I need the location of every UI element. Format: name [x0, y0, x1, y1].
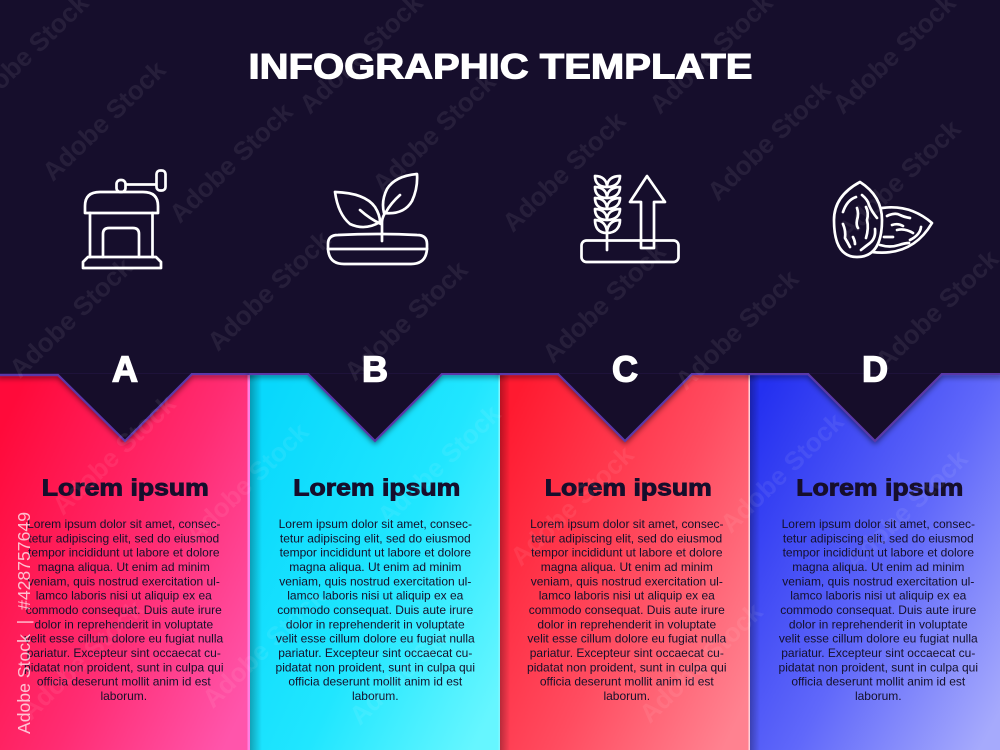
letter C: C — [612, 348, 638, 390]
body text B: magna aliqua. Ut enim ad minim — [289, 560, 461, 574]
stock watermarks: Adobe Stock — [831, 113, 967, 246]
stock watermarks: Adobe Stock — [179, 416, 315, 549]
body text D — [779, 517, 978, 703]
letter B: B — [362, 348, 388, 390]
body text C — [527, 517, 727, 703]
body text D: laborum. — [855, 689, 902, 703]
body text C: veniam, quis nostrud exercitation ul- — [531, 574, 723, 588]
panel: C — [500, 375, 750, 750]
title: INFOGRAPHIC TEMPLATE — [248, 48, 752, 86]
top band cover — [0, 0, 1000, 373]
stock watermarks: Adobe Stock — [46, 388, 182, 521]
body text A: dolor in reprehenderit in voluptate — [34, 617, 214, 631]
stock watermarks: Adobe Stock — [838, 443, 974, 576]
heading D: Lorem ipsum — [796, 474, 963, 500]
notch: D — [750, 372, 1000, 441]
body text B: velit esse cillum dolore eu fugiat nulla — [276, 632, 475, 646]
body text A: laborum. — [100, 689, 147, 703]
body text D: tetur adipiscing elit, sed do eiusmod — [783, 531, 974, 545]
body text D: veniam, quis nostrud exercitation ul- — [782, 574, 974, 588]
notch: B — [250, 372, 500, 441]
stock watermarks: Adobe Stock — [343, 598, 479, 731]
body text C: officia deserunt mollit anim id est — [540, 675, 714, 689]
stock watermarks: Adobe Stock — [496, 105, 632, 238]
stock watermarks: Adobe Stock — [701, 74, 837, 207]
panel: A — [0, 375, 250, 750]
panel: B — [250, 375, 500, 750]
stock watermarks: Adobe Stock — [633, 596, 769, 729]
body text D: tempor incididunt ut labore et dolore — [783, 546, 974, 560]
body text D: velit esse cillum dolore eu fugiat nulla — [779, 632, 978, 646]
stock watermarks: Adobe Stock — [163, 96, 299, 229]
notch: A — [0, 372, 250, 441]
stock watermarks: Adobe Stock — [3, 251, 139, 384]
body text B: commodo consequat. Duis aute irure — [277, 603, 474, 617]
body text C: pariatur. Excepteur sint occaecat cu- — [530, 646, 724, 660]
body text B: laborum. — [352, 689, 399, 703]
body text A: pidatat non proident, sunt in culpa qui — [24, 660, 224, 674]
body text A: velit esse cillum dolore eu fugiat nulla — [24, 632, 224, 646]
letter A: A — [112, 348, 138, 390]
stock watermarks: Adobe Stock — [338, 254, 474, 387]
letter D: D — [862, 348, 888, 390]
body text B: pariatur. Excepteur sint occaecat cu- — [278, 646, 472, 660]
body text B: lamco laboris nisi ut aliquip ex ea — [287, 589, 464, 603]
body text B: tetur adipiscing elit, sed do eiusmod — [280, 531, 471, 545]
body text C: laborum. — [603, 689, 650, 703]
body text A — [24, 517, 224, 703]
stock watermarks: Adobe Stock — [196, 581, 332, 714]
icon: coffee grinder — [83, 170, 166, 268]
body text A: officia deserunt mollit anim id est — [37, 675, 211, 689]
body text A: lamco laboris nisi ut aliquip ex ea — [36, 589, 212, 603]
notch: C — [500, 372, 750, 441]
body text C: Lorem ipsum dolor sit amet, consec- — [530, 517, 724, 531]
stock id side label: Adobe Stock | #428757649 — [14, 512, 34, 734]
body text D: commodo consequat. Duis aute irure — [780, 603, 977, 617]
body text B: Lorem ipsum dolor sit amet, consec- — [279, 517, 472, 531]
body text A: pariatur. Excepteur sint occaecat cu- — [27, 646, 221, 660]
stock watermarks: Adobe Stock — [371, 398, 507, 531]
body text A: commodo consequat. Duis aute irure — [26, 603, 222, 617]
body text A: tetur adipiscing elit, sed do eiusmod — [28, 531, 219, 545]
body text C: tetur adipiscing elit, sed do eiusmod — [531, 531, 722, 545]
icon: almonds — [834, 182, 932, 257]
body text C: pidatat non proident, sunt in culpa qui — [527, 660, 727, 674]
body text D: Lorem ipsum dolor sit amet, consec- — [782, 517, 975, 531]
stock watermarks: Adobe Stock — [714, 406, 850, 539]
body text C: commodo consequat. Duis aute irure — [529, 603, 725, 617]
stock watermarks: Adobe Stock — [36, 54, 172, 187]
body text C: tempor incididunt ut labore et dolore — [531, 546, 723, 560]
body text A: veniam, quis nostrud exercitation ul- — [28, 574, 220, 588]
stock watermarks: Adobe Stock — [669, 263, 805, 396]
body text B — [276, 517, 475, 703]
icon: wheat and arrow — [582, 176, 678, 262]
body text B: veniam, quis nostrud exercitation ul- — [279, 574, 471, 588]
body text D: pidatat non proident, sunt in culpa qui — [779, 660, 978, 674]
stock watermarks: Adobe Stock — [536, 236, 672, 369]
stock watermarks: Adobe Stock — [201, 224, 337, 357]
body text D: dolor in reprehenderit in voluptate — [789, 617, 968, 631]
icon: sprout in soil — [328, 174, 427, 264]
body text D: magna aliqua. Ut enim ad minim — [792, 560, 964, 574]
body text B: tempor incididunt ut labore et dolore — [280, 546, 471, 560]
stock watermarks: Adobe Stock — [366, 66, 502, 199]
body text B: dolor in reprehenderit in voluptate — [286, 617, 465, 631]
body text A: Lorem ipsum dolor sit amet, consec- — [27, 517, 221, 531]
stock watermarks: Adobe Stock — [14, 593, 150, 726]
body text A: tempor incididunt ut labore et dolore — [28, 546, 220, 560]
heading A: Lorem ipsum — [42, 474, 209, 500]
body text B: pidatat non proident, sunt in culpa qui — [276, 660, 475, 674]
heading B: Lorem ipsum — [293, 474, 460, 500]
body text C: velit esse cillum dolore eu fugiat nulla — [527, 632, 727, 646]
body text C: dolor in reprehenderit in voluptate — [537, 617, 717, 631]
heading C: Lorem ipsum — [545, 474, 712, 500]
body text A: magna aliqua. Ut enim ad minim — [38, 560, 210, 574]
stock watermarks: Adobe Stock — [504, 439, 640, 572]
body text C: magna aliqua. Ut enim ad minim — [541, 560, 713, 574]
body text D: officia deserunt mollit anim id est — [791, 675, 966, 689]
body text B: officia deserunt mollit anim id est — [288, 675, 463, 689]
body text C: lamco laboris nisi ut aliquip ex ea — [539, 589, 715, 603]
panel: D — [750, 375, 1000, 750]
body text D: pariatur. Excepteur sint occaecat cu- — [781, 646, 975, 660]
body text D: lamco laboris nisi ut aliquip ex ea — [790, 589, 967, 603]
